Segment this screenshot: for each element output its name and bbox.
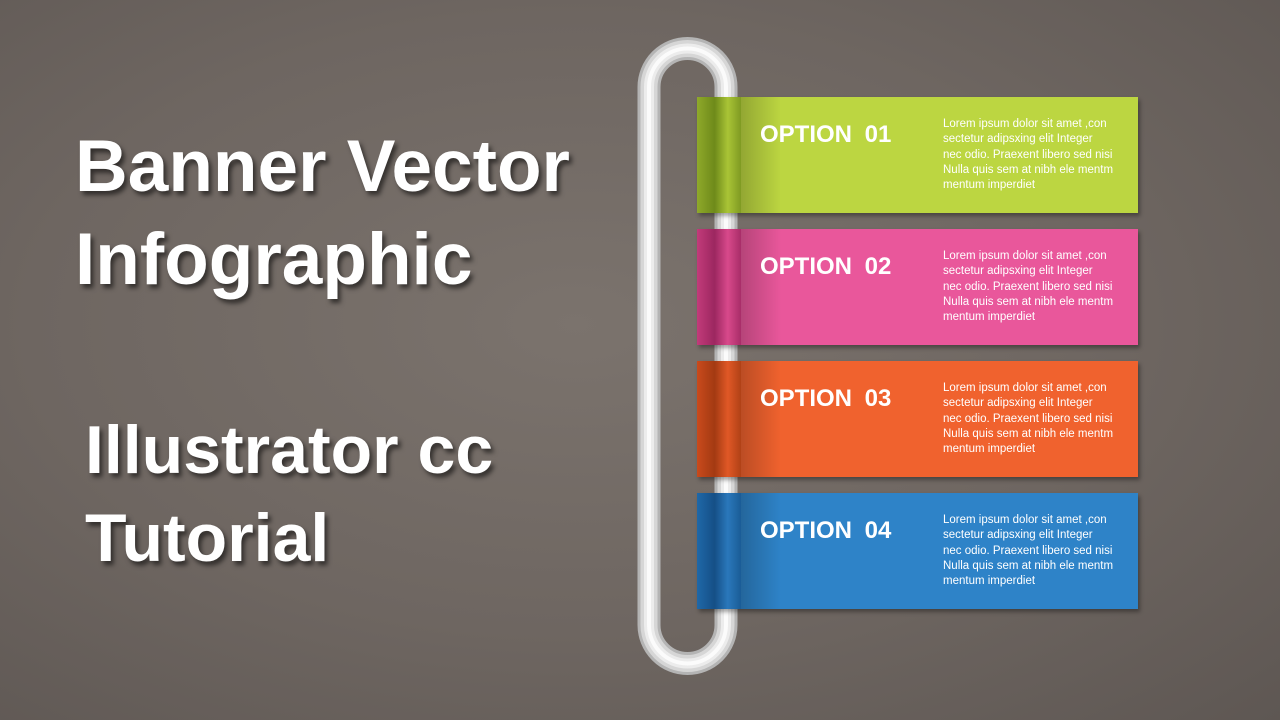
banner: option 03: nec odio. Praexent libero sed nisi — [943, 413, 1112, 425]
banner: option 03: OPTION 03 — [760, 385, 891, 412]
banner: option 02: OPTION 02 — [760, 253, 891, 280]
banner: option 01: Lorem ipsum dolor sit amet ,con — [943, 118, 1107, 130]
banner: option 04: sectetur adipsxing elit Integer — [943, 529, 1093, 541]
banner: option 04: mentum imperdiet — [943, 575, 1035, 587]
banner: option 02: mentum imperdiet — [943, 311, 1035, 323]
banner: option 01: mentum imperdiet — [943, 179, 1035, 191]
banner: option 03 — [697, 361, 1138, 477]
banner: option 02: sectetur adipsxing elit Integer — [943, 265, 1093, 277]
banner: option 04: Nulla quis sem at nibh ele mentm — [943, 560, 1113, 572]
banner: option 01: nec odio. Praexent libero sed nisi — [943, 149, 1112, 161]
banner: option 03: sectetur adipsxing elit Integer — [943, 397, 1093, 409]
banner: option 02: nec odio. Praexent libero sed nisi — [943, 281, 1112, 293]
banner: option 04: nec odio. Praexent libero sed nisi — [943, 545, 1112, 557]
title: Infographic: Infographic — [75, 219, 472, 300]
banner: option 02: Nulla quis sem at nibh ele mentm — [943, 296, 1113, 308]
subtitle: Tutorial: Tutorial — [85, 500, 329, 576]
banner: option 04 — [697, 493, 1138, 609]
banner: option 01: Nulla quis sem at nibh ele mentm — [943, 164, 1113, 176]
banner: option 03: Nulla quis sem at nibh ele mentm — [943, 428, 1113, 440]
banner: option 04: Lorem ipsum dolor sit amet ,con — [943, 514, 1107, 526]
subtitle: Illustrator cc: Illustrator cc — [85, 412, 493, 488]
banner: option 04: OPTION 04 — [760, 517, 891, 544]
title: Banner Vector: Banner Vector — [75, 126, 570, 207]
banner: option 01 — [697, 97, 1138, 213]
banner: option 03: mentum imperdiet — [943, 443, 1035, 455]
banner: option 02 — [697, 229, 1138, 345]
banner: option 01: sectetur adipsxing elit Integer — [943, 133, 1093, 145]
banner: option 03: Lorem ipsum dolor sit amet ,con — [943, 382, 1107, 394]
banner: option 01: OPTION 01 — [760, 121, 891, 148]
banner: option 02: Lorem ipsum dolor sit amet ,con — [943, 250, 1107, 262]
